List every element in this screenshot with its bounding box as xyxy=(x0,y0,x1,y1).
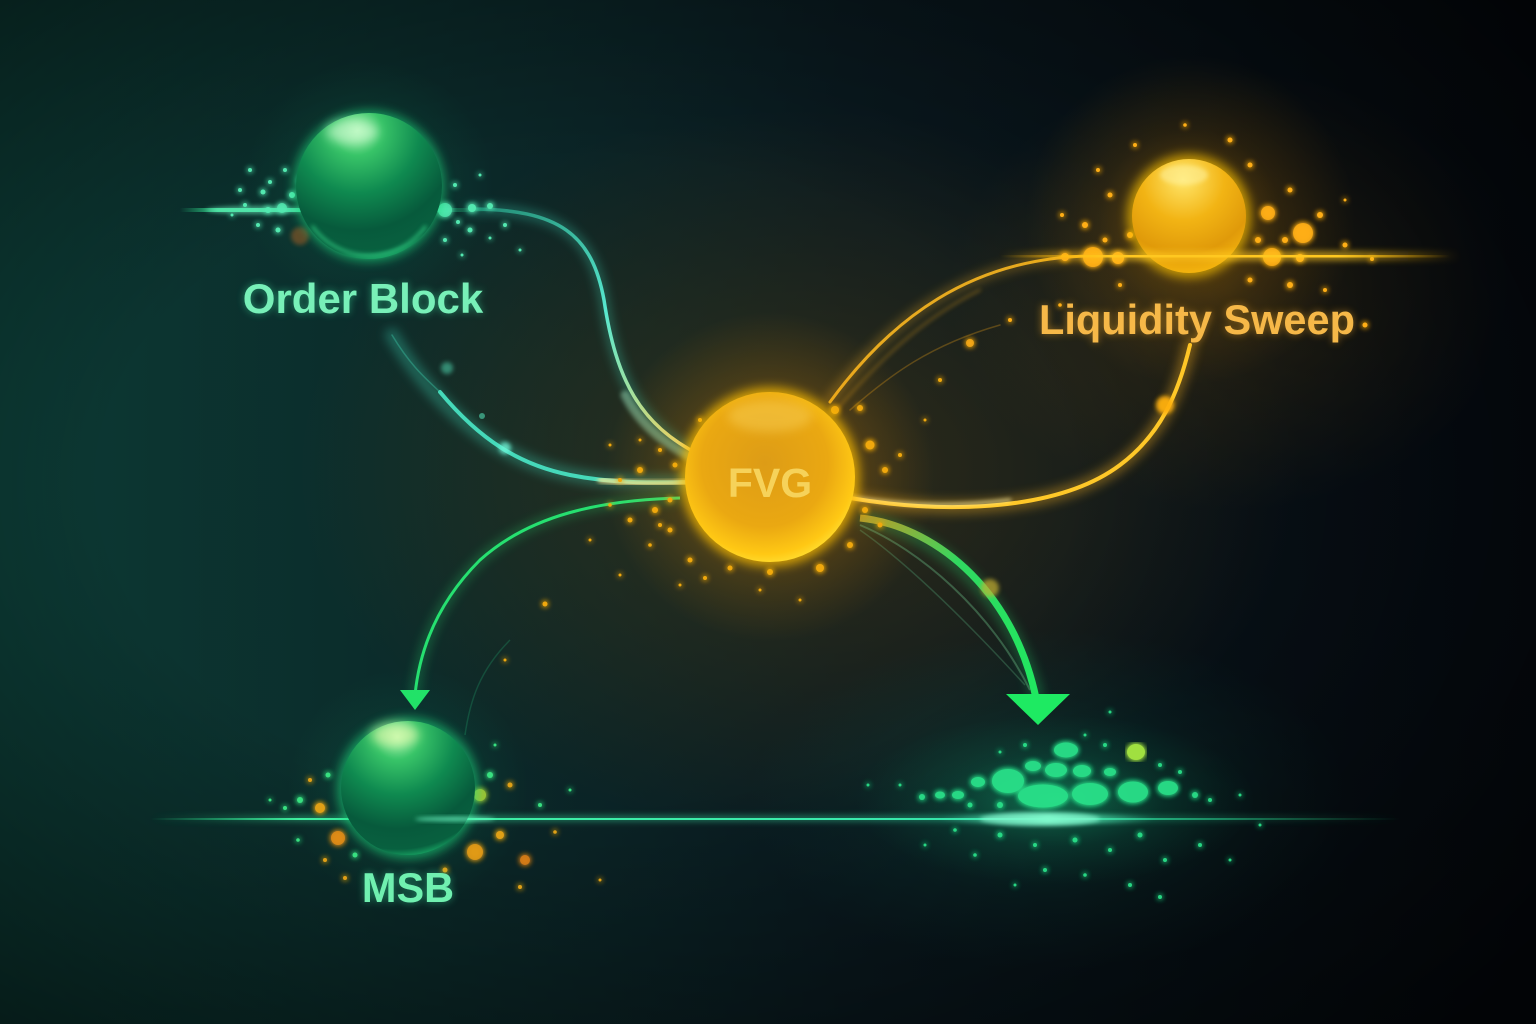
node: Order Block sphere xyxy=(230,61,522,311)
node: Liquidity Sweep sphere xyxy=(966,55,1460,385)
arrow: FVG to MSB xyxy=(400,498,680,735)
baseline light streak xyxy=(150,814,1400,824)
label: Order Block: Order Block xyxy=(243,275,484,322)
label: MSB: MSB xyxy=(362,864,454,911)
horizontal light streak: Order Block xyxy=(180,206,490,214)
horizontal light streak: Liquidity Sweep xyxy=(1000,251,1460,261)
arrow: FVG to target zone xyxy=(860,518,1070,725)
connector: Liquidity Sweep upper curve to FVG xyxy=(830,256,1090,410)
connector: Order Block upper curve to FVG xyxy=(470,209,700,462)
node: MSB sphere xyxy=(268,668,602,908)
label: Order Block: Order Block xyxy=(243,275,484,322)
label: MSB: MSB xyxy=(362,864,454,911)
target zone: droplets cluster xyxy=(855,710,1262,899)
label: Liquidity Sweep: Liquidity Sweep xyxy=(1039,296,1355,343)
node: FVG sphere xyxy=(504,312,942,662)
connector: FVG to Liquidity Sweep lower curve xyxy=(850,345,1190,507)
label: Liquidity Sweep: Liquidity Sweep xyxy=(1039,296,1355,343)
label: FVG: FVG xyxy=(728,460,812,506)
connector: Order Block lower curve to FVG xyxy=(392,335,690,483)
